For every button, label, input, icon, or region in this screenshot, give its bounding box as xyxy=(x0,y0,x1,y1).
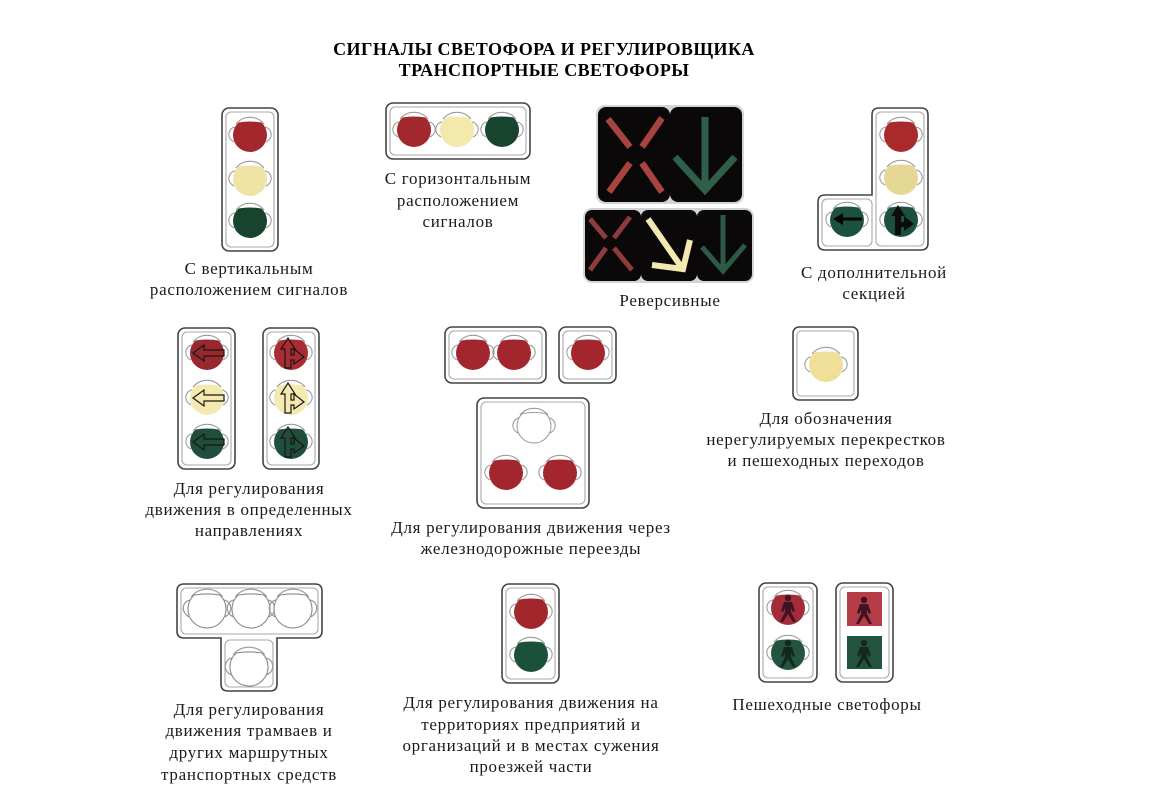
label: railway: Для регулирования движения через xyxy=(391,518,671,537)
label: directional: движения в определенных xyxy=(145,500,353,519)
label: directional xyxy=(145,479,353,540)
label: trams: Для регулирования xyxy=(174,700,324,719)
panel: vertical traffic light xyxy=(222,108,278,251)
label: enterprises: проезжей части xyxy=(470,757,592,776)
panel: additional section xyxy=(818,108,928,250)
label: unregulated crossings: нерегулируемых перекрестков xyxy=(706,430,946,449)
label: additional section xyxy=(801,263,947,303)
label: unregulated crossings: и пешеходных переходов xyxy=(727,451,925,470)
label: vertical: расположением сигналов xyxy=(150,280,348,299)
panel: directional lights xyxy=(178,328,319,469)
panel: flashing yellow light xyxy=(793,327,858,400)
label: additional section: С дополнительной xyxy=(801,263,947,282)
panel: two-section light xyxy=(502,584,559,683)
label: additional section: секцией xyxy=(842,284,906,303)
label: enterprises: организаций и в местах сужения xyxy=(402,736,660,755)
label: enterprises: территориях предприятий и xyxy=(421,715,641,734)
label: directional: направлениях xyxy=(195,521,303,540)
label: trams: транспортных средств xyxy=(161,765,337,784)
panel: pedestrian lights xyxy=(759,583,893,682)
label: unregulated crossings xyxy=(706,409,946,470)
label: horizontal: расположением xyxy=(397,191,519,210)
panel: railway crossing lights xyxy=(445,327,616,508)
title: ТРАНСПОРТНЫЕ СВЕТОФОРЫ xyxy=(399,60,689,80)
label: horizontal: С горизонтальным xyxy=(385,169,531,188)
label: vertical xyxy=(150,259,348,299)
panel: horizontal traffic light xyxy=(386,103,530,159)
label: trams xyxy=(161,700,337,784)
label: reversible: Реверсивные xyxy=(619,291,721,310)
label: unregulated crossings: Для обозначения xyxy=(759,409,893,428)
label: pedestrian: Пешеходные светофоры xyxy=(732,695,922,714)
label: horizontal xyxy=(385,169,531,231)
label: trams: других маршрутных xyxy=(169,743,329,762)
panel: reversible traffic lights xyxy=(583,105,754,283)
label: enterprises xyxy=(402,693,660,776)
label: railway: железнодорожные переезды xyxy=(420,539,641,558)
label: horizontal: сигналов xyxy=(422,212,494,231)
label: enterprises: Для регулирования движения на xyxy=(403,693,659,712)
label: vertical: С вертикальным xyxy=(185,259,313,278)
label: trams: движения трамваев и xyxy=(165,721,333,740)
label: directional: Для регулирования xyxy=(174,479,324,498)
panel: tram lights xyxy=(177,584,322,691)
title: СИГНАЛЫ СВЕТОФОРА И РЕГУЛИРОВЩИКА xyxy=(333,39,755,59)
label: railway xyxy=(391,518,671,558)
title xyxy=(333,39,755,80)
